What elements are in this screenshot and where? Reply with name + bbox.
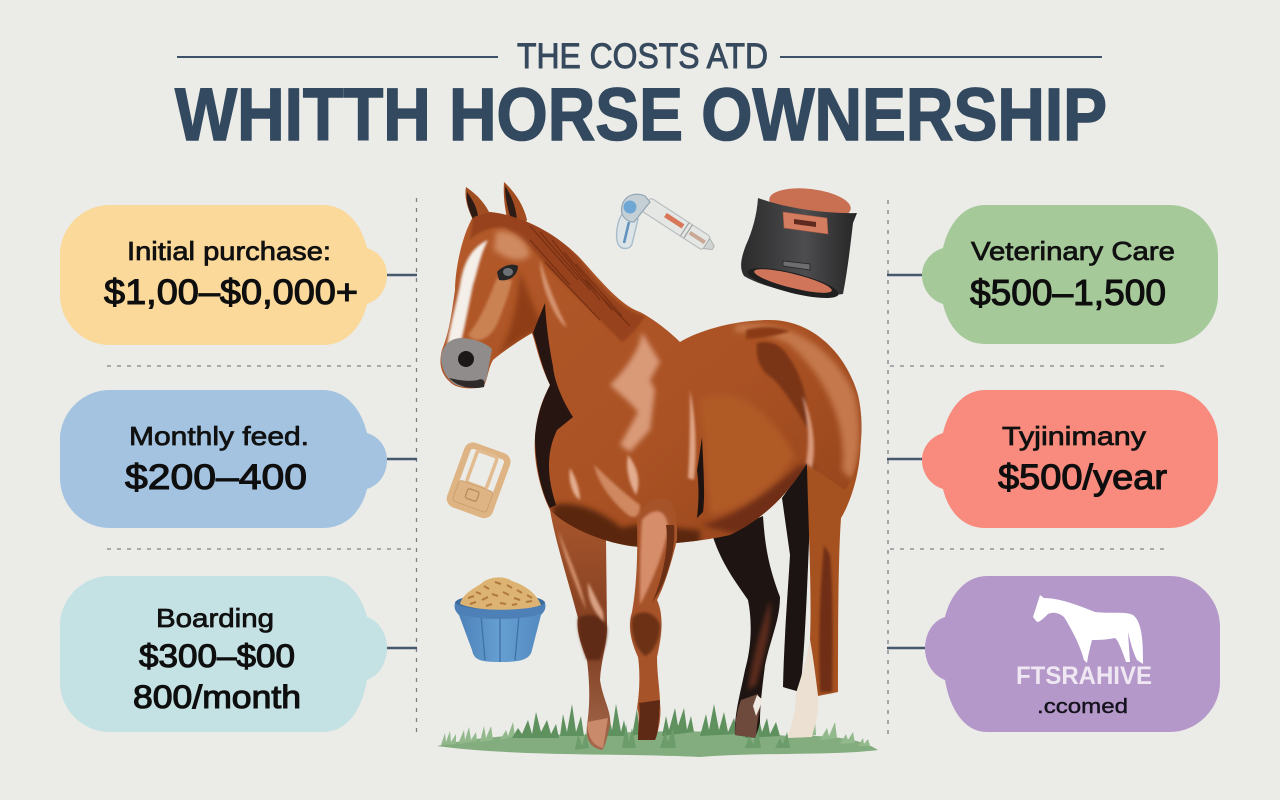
near hind leg bbox=[807, 415, 861, 696]
icon: syringe bbox=[617, 194, 718, 255]
value: $1,00–$0,000+ bbox=[104, 273, 358, 312]
pill shape bbox=[60, 576, 387, 732]
pill shape bbox=[60, 205, 387, 345]
far hind hoof bbox=[735, 694, 761, 738]
torso, neck and head bbox=[440, 212, 862, 547]
label: Tyjinimany bbox=[1002, 421, 1146, 451]
value line one: $300–$00 bbox=[139, 638, 295, 674]
panel: monthly feed bbox=[60, 390, 417, 528]
icon: feed bucket bbox=[455, 577, 545, 662]
panel: boarding bbox=[60, 576, 417, 732]
value: $200–400 bbox=[125, 458, 307, 497]
brand subtext: .ccomed bbox=[1037, 696, 1128, 718]
grass in front of the hooves bbox=[575, 724, 790, 750]
pill shape bbox=[60, 390, 387, 528]
right ear bbox=[504, 182, 527, 226]
eye bbox=[497, 265, 518, 280]
icon: white horse silhouette bbox=[1033, 595, 1143, 664]
panel: veterinary care bbox=[887, 205, 1218, 344]
nostril bbox=[458, 351, 474, 367]
pill shape bbox=[925, 576, 1220, 732]
pill shape bbox=[922, 205, 1218, 344]
label: Monthly feed. bbox=[129, 421, 309, 451]
brand text: FTSRAHIVE bbox=[1016, 662, 1152, 690]
dashed guide lines bbox=[107, 198, 1170, 735]
muzzle bbox=[441, 338, 492, 387]
panel: tyjinimany bbox=[887, 390, 1218, 528]
neck and shoulder highlights bbox=[540, 260, 814, 517]
blades bbox=[441, 720, 870, 746]
header bbox=[175, 37, 1107, 156]
light grass bbox=[437, 731, 878, 757]
connector bbox=[887, 274, 922, 276]
value: $500/year bbox=[998, 458, 1167, 497]
flank dark sliver bbox=[697, 437, 704, 518]
shoulder shadow bbox=[533, 303, 573, 508]
mane bbox=[470, 211, 645, 342]
far front leg bbox=[550, 510, 610, 750]
white sock bbox=[787, 640, 818, 738]
subtitle rules bbox=[177, 56, 1102, 58]
label: Initial purchase: bbox=[127, 236, 331, 266]
value: $500–1,500 bbox=[970, 272, 1166, 313]
connector bbox=[887, 647, 925, 649]
face blaze bbox=[447, 240, 488, 354]
label: Boarding bbox=[156, 603, 274, 633]
title: WHITTH HORSE OWNERSHIP bbox=[175, 73, 1107, 156]
panel: initial purchase bbox=[60, 205, 417, 345]
tail bbox=[782, 463, 810, 692]
value line two: 800/month bbox=[133, 679, 301, 715]
connector bbox=[387, 274, 417, 276]
face highlights bbox=[468, 278, 512, 340]
connector bbox=[387, 458, 417, 460]
soft body shading bbox=[494, 231, 859, 550]
horse illustration bbox=[440, 182, 862, 750]
near front leg bbox=[630, 498, 677, 740]
subtitle: THE COSTS ATD bbox=[517, 37, 768, 76]
left ear bbox=[465, 187, 490, 222]
connector bbox=[387, 647, 417, 649]
icon: hoof boot bbox=[741, 184, 857, 304]
pill shape bbox=[922, 390, 1218, 528]
icon: buckle bbox=[448, 444, 509, 517]
far hind leg bbox=[713, 516, 780, 738]
panel: logo bbox=[887, 576, 1220, 732]
label: Veterinary Care bbox=[971, 236, 1175, 266]
connector bbox=[887, 458, 922, 460]
grass behind the hooves bbox=[437, 704, 878, 757]
